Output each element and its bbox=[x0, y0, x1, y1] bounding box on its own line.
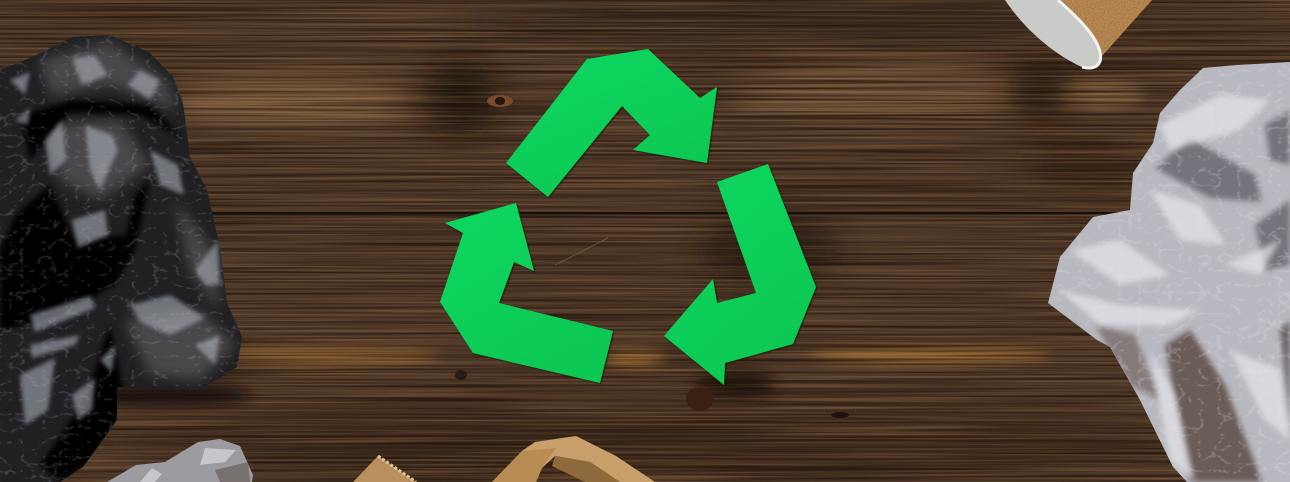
warm and dark wood tones bbox=[120, 4, 1160, 475]
black plastic bag bbox=[0, 0, 260, 482]
plank seam bbox=[0, 212, 1290, 214]
cup kraft body bbox=[1056, 0, 1152, 56]
cup white interior bbox=[1005, 0, 1101, 68]
arrow: right bbox=[664, 164, 816, 385]
brown paper packet at bottom bbox=[353, 456, 416, 482]
soft grey body of the lobes bbox=[40, 42, 235, 380]
paper bag handle at bottom bbox=[492, 436, 655, 482]
brown table seen through the bag bbox=[1095, 320, 1290, 482]
bright crumple highlights bbox=[10, 55, 220, 425]
recycling symbol bbox=[440, 49, 816, 385]
bright highlights bbox=[1060, 95, 1290, 482]
crinkle texture bbox=[1040, 50, 1290, 482]
clear plastic bag bbox=[1040, 50, 1290, 482]
arrow: left bbox=[440, 203, 613, 383]
arrow: top bbox=[506, 49, 717, 197]
wood knots bbox=[455, 95, 849, 418]
small clear bag at bottom bbox=[107, 439, 253, 482]
dark folds of the bag bbox=[0, 100, 185, 482]
grey shaded folds bbox=[1155, 110, 1290, 270]
paper cup bbox=[1005, 0, 1152, 68]
